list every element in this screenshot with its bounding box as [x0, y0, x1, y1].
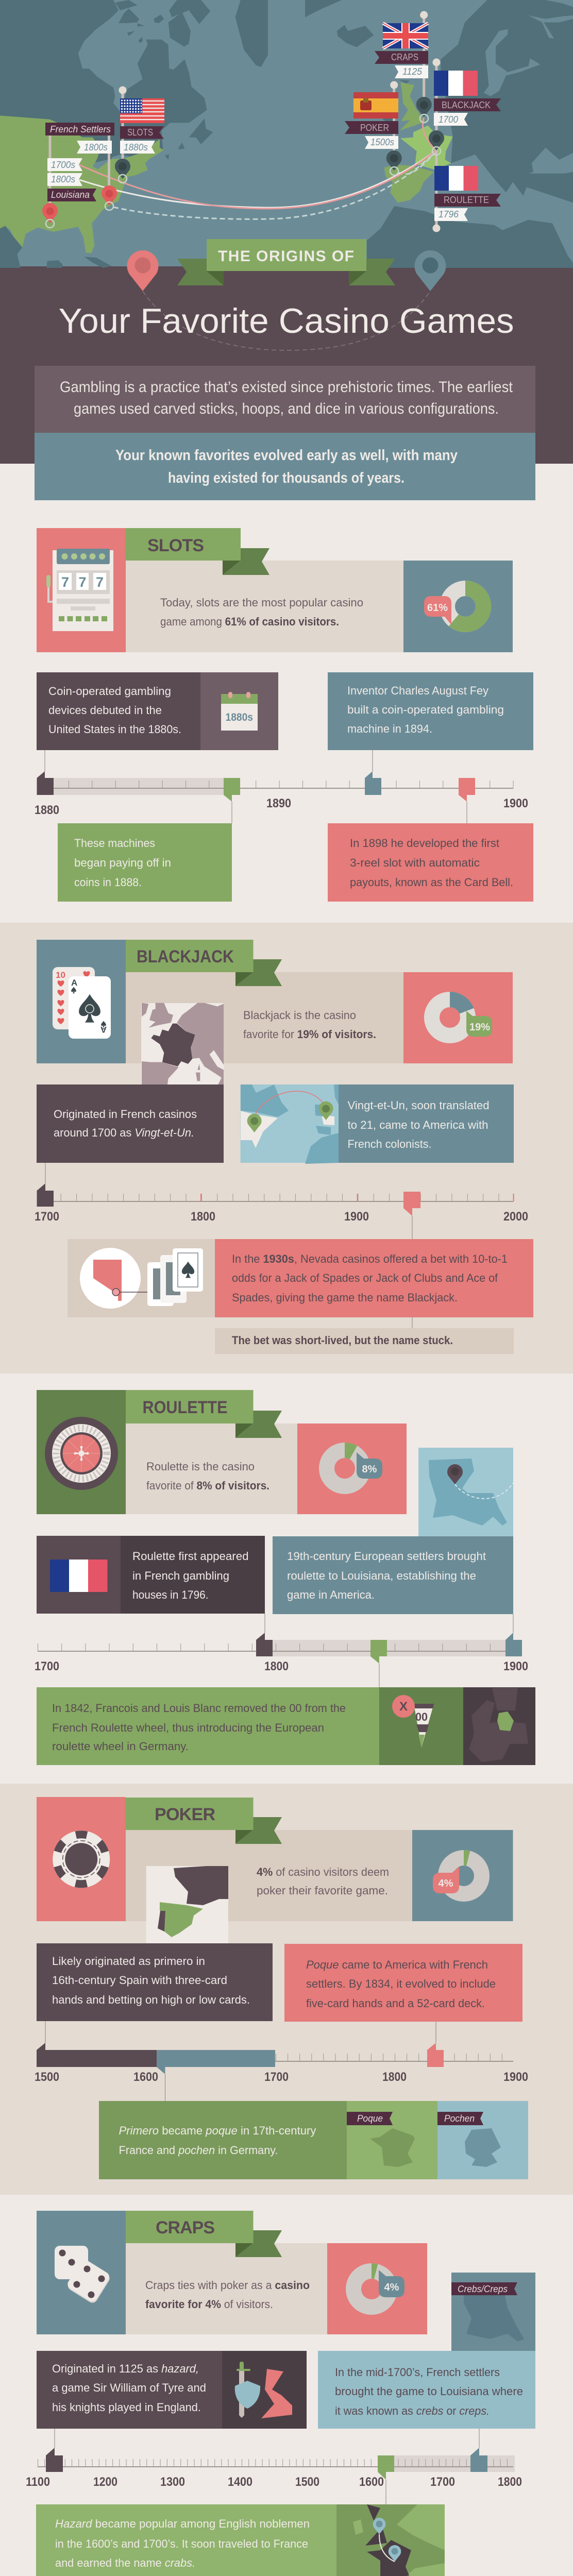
icon: slot machine: 7 — [96, 574, 104, 590]
flag post: poker: POKER — [360, 123, 389, 133]
icon: sword and shield — [235, 2362, 260, 2418]
text: craps popularity — [145, 2279, 310, 2311]
callout: hazard to crabs: and earned the name crabs. — [55, 2556, 195, 2569]
timeline: slots 1880 to 1900: 1890 — [266, 796, 291, 810]
flag post: blackjack and roulette: 1700 — [439, 114, 458, 125]
timeline: craps 1100 to 1800: 1800 — [498, 2475, 522, 2489]
callout: charles fey: Inventor Charles August Fey — [347, 684, 488, 697]
map: louisiana crebs and creps: Crebs/Creps — [458, 2284, 508, 2294]
flag post: french settlers: 1700s — [51, 160, 75, 170]
icon: dice — [55, 2246, 111, 2304]
map: england to france — [336, 2504, 445, 2576]
map: louisiana crebs and creps — [451, 2273, 535, 2351]
map: spain — [146, 1866, 228, 1943]
timeline: craps 1100 to 1800: 1400 — [228, 2475, 252, 2489]
callout: paying off in coins: These machines — [74, 837, 155, 850]
icon: double zero wedge: 00 — [415, 1710, 428, 1723]
callout: european roulette wheel: roulette wheel in Germany. — [52, 1740, 189, 1753]
callout: bet short-lived — [215, 1328, 514, 1354]
panel: slots header — [37, 528, 403, 652]
callout: nevada bet — [215, 1239, 533, 1317]
timeline: craps 1100 to 1800 — [26, 2429, 522, 2504]
callout: primero origin: Likely originated as primero in — [52, 1955, 205, 1968]
flag post: blackjack and roulette: ROULETTE — [444, 195, 489, 205]
callout: hazard to crabs: Hazard became popular among English noblemen — [55, 2517, 310, 2530]
icon: double zero wedge — [392, 1695, 434, 1748]
callout: french colonists: Vingt-et-Un, soon translated — [347, 1099, 490, 1112]
callout: card bell — [328, 823, 533, 902]
callout: nevada bet: Spades, giving the game the name Blackjack. — [232, 1291, 458, 1304]
ribbon: the origins of — [177, 239, 395, 285]
callout: crebs and creps: In the mid-1700’s, French settlers — [335, 2366, 500, 2379]
callout: french gambling houses: houses in 1796. — [132, 1588, 208, 1601]
icon: poker chip — [53, 1831, 110, 1888]
callout: crebs and creps: brought the game to Louisiana where — [335, 2385, 523, 2398]
title: Your Favorite Casino Games — [59, 301, 514, 341]
timeline: craps 1100 to 1800: 1200 — [93, 2475, 117, 2489]
intro panel — [35, 366, 535, 433]
panel: roulette header — [37, 1390, 297, 1514]
timeline: craps 1100 to 1800: 1700 — [430, 2475, 455, 2489]
heading: roulette: ROULETTE — [142, 1398, 228, 1417]
text: poker popularity: poker their favorite game. — [257, 1884, 388, 1897]
text: blackjack popularity: favorite for 19% of visitors. — [243, 1028, 376, 1041]
timeline: roulette 1700 to 1900: 1800 — [264, 1659, 289, 1673]
callout: card bell: 3-reel slot with automatic — [350, 856, 480, 869]
icon: calendar 1880s: 1880s — [226, 711, 253, 723]
callout: card bell: payouts, known as the Card Bell. — [350, 876, 513, 889]
flag post: blackjack and roulette: 1796 — [439, 209, 459, 219]
text: roulette popularity — [146, 1460, 269, 1492]
map: germany pochen — [437, 2112, 501, 2167]
callout: european settlers: roulette to Louisiana, establishing the — [287, 1569, 476, 1582]
icon: playing cards: 10 — [56, 970, 65, 980]
text: roulette popularity: favorite of 8% of visitors. — [146, 1479, 269, 1492]
timeline: slots 1880 to 1900: 1880 — [35, 803, 59, 817]
callout: coin-operated devices: Coin-operated gambling — [48, 685, 171, 698]
timeline: poker 1500 to 1900: 1700 — [264, 2070, 289, 2084]
callout: coin-operated devices — [37, 672, 278, 750]
icon: nevada and black jack cards — [68, 1239, 215, 1317]
callout: poque and pochen — [99, 2101, 528, 2179]
icon: britain map — [261, 2369, 292, 2418]
timeline: blackjack 1700 to 2000: 2000 — [503, 1210, 528, 1224]
callout: charles fey — [328, 672, 533, 750]
text: poker popularity — [257, 1866, 389, 1897]
flag post: slots — [115, 87, 164, 183]
timeline: blackjack 1700 to 2000: 1900 — [344, 1210, 369, 1224]
timeline: roulette 1700 to 1900 — [35, 1614, 528, 1687]
callout: european settlers: 19th-century European settlers brought — [287, 1550, 486, 1563]
flag post: poker: 1500s — [370, 137, 394, 147]
callout: poque and pochen: France and pochen in Germany. — [119, 2144, 278, 2157]
heading: blackjack: BLACKJACK — [137, 947, 234, 967]
flag post: french settlers — [42, 123, 117, 228]
timeline: poker 1500 to 1900: 1800 — [382, 2070, 407, 2084]
callout: european settlers: game in America. — [287, 1588, 375, 1601]
callout: coin-operated devices: devices debuted in the — [48, 704, 162, 717]
callout: vingt-et-un origin: around 1700 as Vingt-et-Un. — [54, 1126, 194, 1139]
callout: crebs and creps — [318, 2351, 535, 2429]
icon: pink title pin — [127, 250, 158, 291]
map: germany pochen: Pochen — [444, 2113, 475, 2124]
chart: slots 61% donut: 61% — [427, 602, 448, 614]
flag post: french settlers: Louisiana — [51, 190, 90, 200]
intro panel: games used carved sticks, hoops, and dice in various configurations. — [74, 400, 499, 417]
text: craps popularity: Craps ties with poker as a casino — [145, 2279, 310, 2292]
callout: primero origin — [37, 1943, 273, 2021]
icon: playing cards: A — [100, 1025, 107, 1035]
callout: poque in america — [284, 1944, 523, 2022]
text: poker popularity: 4% of casino visitors deem — [257, 1866, 389, 1878]
icon: calendar 1880s — [221, 692, 258, 731]
callout: french colonists: to 21, came to America with — [347, 1118, 488, 1131]
callout: poque in america: five-card hands and a 52-card deck. — [306, 1997, 485, 2010]
map: louisiana — [418, 1448, 513, 1536]
callout: charles fey: built a coin-operated gambling — [347, 703, 504, 716]
flag post: slots: 1880s — [124, 142, 148, 152]
callout: european roulette wheel — [37, 1687, 535, 1765]
callout: paying off in coins — [58, 823, 232, 902]
world map — [0, 0, 573, 268]
icon: blue title pin — [415, 250, 446, 291]
callout: vingt-et-un origin: Originated in French casinos — [54, 1108, 197, 1121]
icon: roulette wheel — [45, 1417, 118, 1490]
callout: french gambling houses: in French gambling — [132, 1569, 229, 1582]
map: france — [141, 1003, 224, 1084]
timeline: craps 1100 to 1800: 1100 — [26, 2475, 50, 2489]
timeline: poker 1500 to 1900: 1600 — [133, 2070, 158, 2084]
callout: poque in america: settlers. By 1834, it evolved to include — [306, 1977, 496, 1990]
callout: hazard origin: a game Sir William of Tyre and — [52, 2381, 206, 2394]
callout: paying off in coins: coins in 1888. — [74, 876, 142, 889]
flag post: poker — [345, 81, 402, 175]
intro highlight panel: having existed for thousands of years. — [168, 470, 405, 486]
callout: european roulette wheel: French Roulette wheel, thus introducing the European — [52, 1721, 324, 1734]
callout: primero origin: hands and betting on high or low cards. — [52, 1993, 250, 2006]
callout: european settlers — [273, 1536, 513, 1614]
flag post: craps: CRAPS — [391, 52, 418, 62]
text: blackjack popularity — [243, 1009, 376, 1041]
icon: slot machine: 7 — [61, 574, 69, 590]
callout: nevada bet: odds for a Jack of Spades or Jack of Clubs and Ace of — [232, 1272, 498, 1284]
callout: european roulette wheel: In 1842, Francois and Louis Blanc removed the 00 from the — [52, 1702, 346, 1715]
flag post: french settlers: 1800s — [51, 174, 75, 184]
callout: french colonists: French colonists. — [347, 1138, 432, 1150]
heading: poker: POKER — [155, 1805, 215, 1824]
icon: double zero wedge: X — [399, 1700, 408, 1714]
text: slots popularity: Today, slots are the most popular casino — [160, 596, 363, 609]
map: atlantic crossing — [240, 1084, 339, 1164]
text: blackjack popularity: Blackjack is the casino — [243, 1009, 356, 1022]
panel: craps header — [37, 2211, 327, 2334]
intro highlight panel: Your known favorites evolved early as well, with many — [115, 447, 458, 464]
callout: hazard to crabs: in the 1600’s and 1700’s. It soon traveled to France — [55, 2537, 308, 2550]
panel: blackjack header — [37, 940, 403, 1063]
flag post: french settlers: French Settlers — [50, 124, 111, 134]
heading: craps: CRAPS — [156, 2218, 215, 2238]
icon: french flag — [50, 1560, 107, 1592]
callout: french gambling houses: Roulette first appeared — [132, 1550, 248, 1563]
callout: poque in america: Poque came to America with French — [306, 1958, 488, 1971]
text: slots popularity: game among 61% of casino visitors. — [160, 615, 339, 628]
icon: playing cards — [53, 967, 111, 1039]
timeline: poker 1500 to 1900: 1500 — [35, 2070, 59, 2084]
icon: slot machine — [46, 549, 113, 631]
text: slots popularity — [160, 596, 363, 628]
flag post: craps — [375, 11, 432, 123]
callout: card bell: In 1898 he developed the first — [350, 837, 499, 850]
timeline: craps 1100 to 1800: 1300 — [160, 2475, 185, 2489]
dashed arc between title pins — [143, 291, 430, 350]
intro highlight panel — [35, 433, 535, 500]
timeline: poker 1500 to 1900: 1900 — [503, 2070, 528, 2084]
timeline: slots 1880 to 1900: 1900 — [503, 796, 528, 810]
timeline: roulette 1700 to 1900: 1700 — [35, 1659, 59, 1673]
flag post: blackjack and roulette: BLACKJACK — [442, 100, 491, 110]
timeline: blackjack 1700 to 2000: 1700 — [35, 1210, 59, 1224]
timeline: blackjack 1700 to 2000 — [35, 1163, 528, 1328]
callout: charles fey: machine in 1894. — [347, 722, 432, 735]
timeline: craps 1100 to 1800: 1600 — [359, 2475, 384, 2489]
callout: nevada bet: In the 1930s, Nevada casinos offered a bet with 10-to-1 — [232, 1252, 508, 1265]
callout: hazard origin: his knights played in England. — [52, 2401, 201, 2414]
chart: blackjack 19% donut: 19% — [469, 1022, 490, 1033]
callout: coin-operated devices: United States in the 1880s. — [48, 723, 181, 736]
timeline: poker 1500 to 1900 — [35, 2021, 528, 2101]
callout: hazard origin — [37, 2351, 307, 2429]
flag post: blackjack and roulette — [429, 59, 501, 232]
text: craps popularity: favorite for 4% of visitors. — [145, 2298, 273, 2311]
callout: french gambling houses — [37, 1536, 265, 1614]
chart: craps 4% donut — [327, 2243, 427, 2334]
callout: vingt-et-un origin — [37, 1084, 224, 1163]
chart: slots 61% donut — [403, 561, 513, 652]
callout: crebs and creps: it was known as crebs or creps. — [335, 2404, 490, 2417]
panel: poker header — [37, 1797, 412, 1921]
flag post: french settlers: 1800s — [84, 142, 108, 152]
map: france poque: Poque — [357, 2113, 383, 2124]
icon: playing cards: A — [71, 978, 77, 988]
map: france poque — [347, 2112, 415, 2167]
callout: hazard origin: Originated in 1125 as hazard, — [52, 2362, 199, 2375]
route lines — [79, 117, 436, 219]
flag post: craps: 1125 — [402, 66, 423, 77]
icon: slot machine: 7 — [78, 574, 87, 590]
callout: bet short-lived: The bet was short-lived, but the name stuck. — [232, 1334, 453, 1347]
text: roulette popularity: Roulette is the casino — [146, 1460, 255, 1473]
flag post: slots: SLOTS — [127, 127, 153, 138]
callout: primero origin: 16th-century Spain with three-card — [52, 1974, 227, 1987]
intro panel: Gambling is a practice that’s existed since prehistoric times. The earliest — [60, 379, 513, 396]
callout: poque and pochen: Primero became poque in 17th-century — [119, 2124, 316, 2137]
chart: blackjack 19% donut — [403, 972, 513, 1063]
heading: slots: SLOTS — [147, 536, 204, 555]
timeline: craps 1100 to 1800: 1500 — [295, 2475, 319, 2489]
timeline: blackjack 1700 to 2000: 1800 — [191, 1210, 215, 1224]
timeline: slots 1880 to 1900 — [35, 749, 528, 823]
chart: poker 4% donut — [412, 1830, 513, 1921]
chart: craps 4% donut: 4% — [384, 2282, 399, 2293]
callout: french colonists — [339, 1084, 514, 1163]
chart: roulette 8% donut: 8% — [362, 1464, 377, 1475]
chart: roulette 8% donut — [297, 1423, 407, 1514]
ribbon: the origins of: THE ORIGINS OF — [218, 248, 354, 265]
timeline: roulette 1700 to 1900: 1900 — [503, 1659, 528, 1673]
callout: hazard to crabs — [36, 2504, 445, 2576]
chart: poker 4% donut: 4% — [439, 1878, 453, 1889]
callout: paying off in coins: began paying off in — [74, 856, 171, 869]
map: germany in europe — [469, 1688, 528, 1762]
